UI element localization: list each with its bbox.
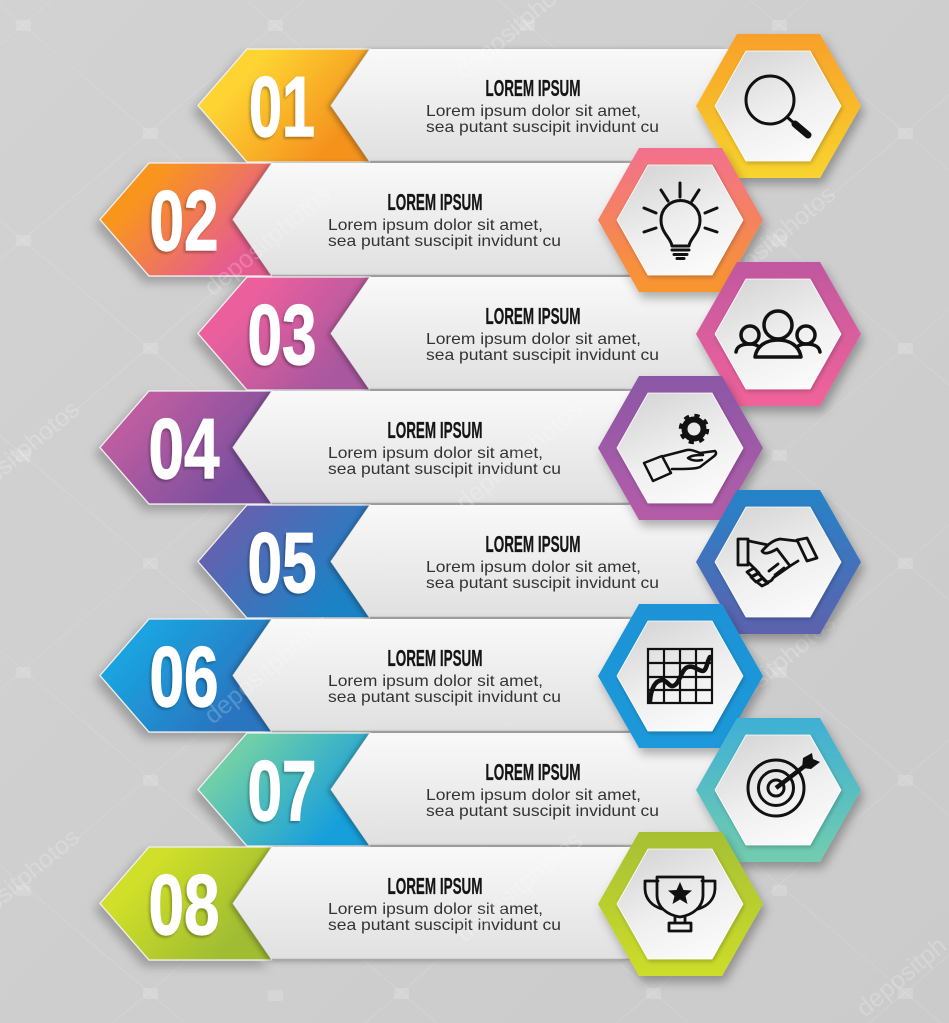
number 03: 03 xyxy=(248,288,316,383)
text 07: Lorem ipsum dolor sit amet, xyxy=(426,787,641,804)
panel: row 1 xyxy=(198,49,728,162)
heading 01: LOREM IPSUM xyxy=(486,75,580,101)
icon: target with arrow xyxy=(748,753,820,816)
watermark: depositphotos xyxy=(199,608,336,730)
body 06 xyxy=(233,619,630,732)
panel: row 3: sea putant suscipit invidunt cu xyxy=(426,347,659,364)
panel: row 2: sea putant suscipit invidunt cu xyxy=(328,233,561,250)
panel: row 6 xyxy=(100,619,630,732)
panel: row 7 xyxy=(198,733,728,846)
number 06: 06 xyxy=(150,630,218,725)
body 08 xyxy=(233,847,630,960)
heading 05: LOREM IPSUM xyxy=(486,531,580,557)
text 06: Lorem ipsum dolor sit amet, xyxy=(328,673,543,690)
panel: row 1: sea putant suscipit invidunt cu xyxy=(426,119,659,136)
text 03: Lorem ipsum dolor sit amet, xyxy=(426,331,641,348)
body 04 xyxy=(233,391,630,504)
watermark: depositph xyxy=(851,931,949,1023)
hexagon 6 xyxy=(598,604,763,748)
text 05: Lorem ipsum dolor sit amet, xyxy=(426,559,641,576)
hexagon 1 xyxy=(696,34,861,178)
tag 01 xyxy=(198,49,370,162)
watermark: depositphotos xyxy=(704,180,841,302)
heading 03: LOREM IPSUM xyxy=(486,303,580,329)
panel: row 5: sea putant suscipit invidunt cu xyxy=(426,575,659,592)
watermark: depositphotos xyxy=(451,826,588,948)
heading 08: LOREM IPSUM xyxy=(388,873,482,899)
body 03 xyxy=(331,277,728,390)
body 07 xyxy=(331,733,728,846)
tag 07 xyxy=(198,733,370,846)
body 05 xyxy=(331,505,728,618)
heading 06: LOREM IPSUM xyxy=(388,645,482,671)
icon: hand holding gear xyxy=(644,416,716,481)
number 02: 02 xyxy=(150,174,218,269)
heading 04: LOREM IPSUM xyxy=(388,417,482,443)
watermark: depositphotos xyxy=(199,180,336,302)
hexagon 7 xyxy=(696,718,861,862)
hexagon 3 xyxy=(696,262,861,406)
panel: row 4: sea putant suscipit invidunt cu xyxy=(328,461,561,478)
number 08: 08 xyxy=(148,858,220,953)
tag 03 xyxy=(198,277,370,390)
watermark: depositphotos xyxy=(704,608,841,730)
panel: row 7: sea putant suscipit invidunt cu xyxy=(426,803,659,820)
icon: trophy xyxy=(645,877,715,931)
panel: row 6: sea putant suscipit invidunt cu xyxy=(328,689,561,706)
panel: row 2 xyxy=(100,163,630,276)
tag 02 xyxy=(100,163,272,276)
panel: row 8: sea putant suscipit invidunt cu xyxy=(328,917,561,934)
text 02: Lorem ipsum dolor sit amet, xyxy=(328,217,543,234)
panel: row 4 xyxy=(100,391,630,504)
tag 08 xyxy=(100,847,272,960)
number 07: 07 xyxy=(248,744,316,839)
body 02 xyxy=(233,163,630,276)
icon: line chart on grid xyxy=(648,649,712,703)
hexagon 2 xyxy=(598,148,763,292)
body 01 xyxy=(331,49,728,162)
number 05: 05 xyxy=(248,516,316,611)
heading 07: LOREM IPSUM xyxy=(486,759,580,785)
tag 04 xyxy=(100,391,272,504)
hexagon 8 xyxy=(598,832,763,976)
panel: row 3 xyxy=(198,277,728,390)
panel: row 8 xyxy=(100,847,630,960)
heading 02: LOREM IPSUM xyxy=(388,189,482,215)
tag 06 xyxy=(100,619,272,732)
hexagon 5 xyxy=(696,490,861,634)
icon: handshake xyxy=(738,538,817,586)
icon: light bulb xyxy=(644,183,717,258)
icon: team of people xyxy=(736,311,820,357)
text 08: Lorem ipsum dolor sit amet, xyxy=(328,901,543,918)
text 04: Lorem ipsum dolor sit amet, xyxy=(328,445,543,462)
panel: row 5 xyxy=(198,505,728,618)
icon: magnifying glass xyxy=(746,76,808,135)
hexagon 4 xyxy=(598,376,763,520)
text 01: Lorem ipsum dolor sit amet, xyxy=(426,103,641,120)
tag 05 xyxy=(198,505,370,618)
watermark: depositphotos xyxy=(451,395,588,517)
number 01: 01 xyxy=(249,60,315,155)
number 04: 04 xyxy=(148,402,220,497)
